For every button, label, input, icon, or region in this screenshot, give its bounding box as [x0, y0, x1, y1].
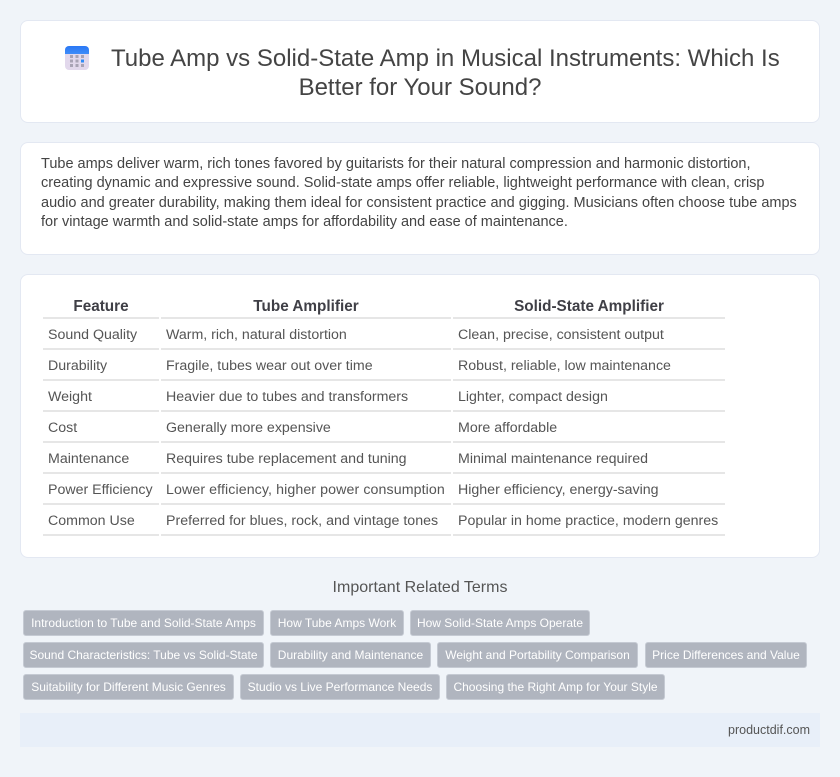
footer bar: [20, 713, 820, 747]
comparison table: Durability: [48, 358, 107, 374]
icon: calendar: [65, 46, 89, 70]
comparison table: Common Use: [48, 513, 135, 529]
panel: header card: [20, 20, 820, 123]
comparison table: Generally more expensive: [166, 420, 331, 436]
comparison table: Solid-State Amplifier: [514, 298, 664, 315]
text block: introduction: [41, 156, 797, 230]
comparison table: Higher efficiency, energy-saving: [458, 482, 659, 498]
panel: introduction card: [20, 142, 820, 255]
comparison table: Power Efficiency: [48, 482, 153, 498]
related terms chips: Choosing the Right Amp for Your Style: [453, 680, 658, 694]
comparison table: More affordable: [458, 420, 557, 436]
comparison table: Fragile, tubes wear out over time: [166, 358, 373, 374]
related terms chips: Price Differences and Value: [652, 648, 800, 662]
text block: introduction: Tube amps deliver warm, rich tones favored by guitarists for their natural compression and harmonic distortion,: [41, 156, 750, 172]
related terms chips: Durability and Maintenance: [278, 648, 423, 662]
comparison table: Heavier due to tubes and transformers: [166, 389, 408, 405]
comparison table: [43, 298, 725, 536]
related terms chips: Studio vs Live Performance Needs: [248, 680, 432, 694]
related terms chips: [23, 610, 807, 700]
related terms chips: Sound Characteristics: Tube vs Solid-State: [29, 648, 258, 662]
comparison table: Maintenance: [48, 451, 129, 467]
comparison table: Lower efficiency, higher power consumption: [166, 482, 445, 498]
text block: introduction: audio and greater durability, making them ideal for consistent practice and gigging. Musicians often choose tube amps: [41, 195, 797, 211]
comparison table: Requires tube replacement and tuning: [166, 451, 407, 467]
comparison table: Clean, precise, consistent output: [458, 327, 664, 343]
comparison table: Warm, rich, natural distortion: [166, 327, 347, 343]
related terms chips: Weight and Portability Comparison: [445, 648, 630, 662]
comparison table: Preferred for blues, rock, and vintage tones: [166, 513, 438, 529]
comparison table: Minimal maintenance required: [458, 451, 648, 467]
title: [111, 45, 780, 101]
comparison table: Cost: [48, 420, 77, 436]
comparison table: Robust, reliable, low maintenance: [458, 358, 671, 374]
comparison table: Feature: [73, 298, 129, 315]
comparison table: Tube Amplifier: [253, 298, 359, 315]
related terms chips: How Solid-State Amps Operate: [417, 616, 583, 630]
related terms chips: Suitability for Different Music Genres: [31, 680, 226, 694]
panel: comparison table card: [20, 274, 820, 558]
comparison table: Lighter, compact design: [458, 389, 608, 405]
text block: introduction: creating dynamic and expressive sound. Solid-state amps offer reliable, lightweight performance with clean, crisp: [41, 175, 764, 191]
related terms chips: Introduction to Tube and Solid-State Amps: [31, 616, 256, 630]
text block: introduction: for vintage warmth and solid-state amps for affordability and ease of maintenance.: [41, 214, 568, 230]
heading: related terms: Important Related Terms: [333, 579, 507, 596]
comparison table: Popular in home practice, modern genres: [458, 513, 718, 529]
comparison table: Sound Quality: [48, 327, 137, 343]
footer text: source: productdif.com: [728, 723, 810, 737]
related terms chips: How Tube Amps Work: [278, 616, 396, 630]
comparison table: Weight: [48, 389, 92, 405]
title: Tube Amp vs Solid-State Amp in Musical Instruments: Which Is: [111, 45, 780, 72]
title: Better for Your Sound?: [299, 74, 541, 101]
